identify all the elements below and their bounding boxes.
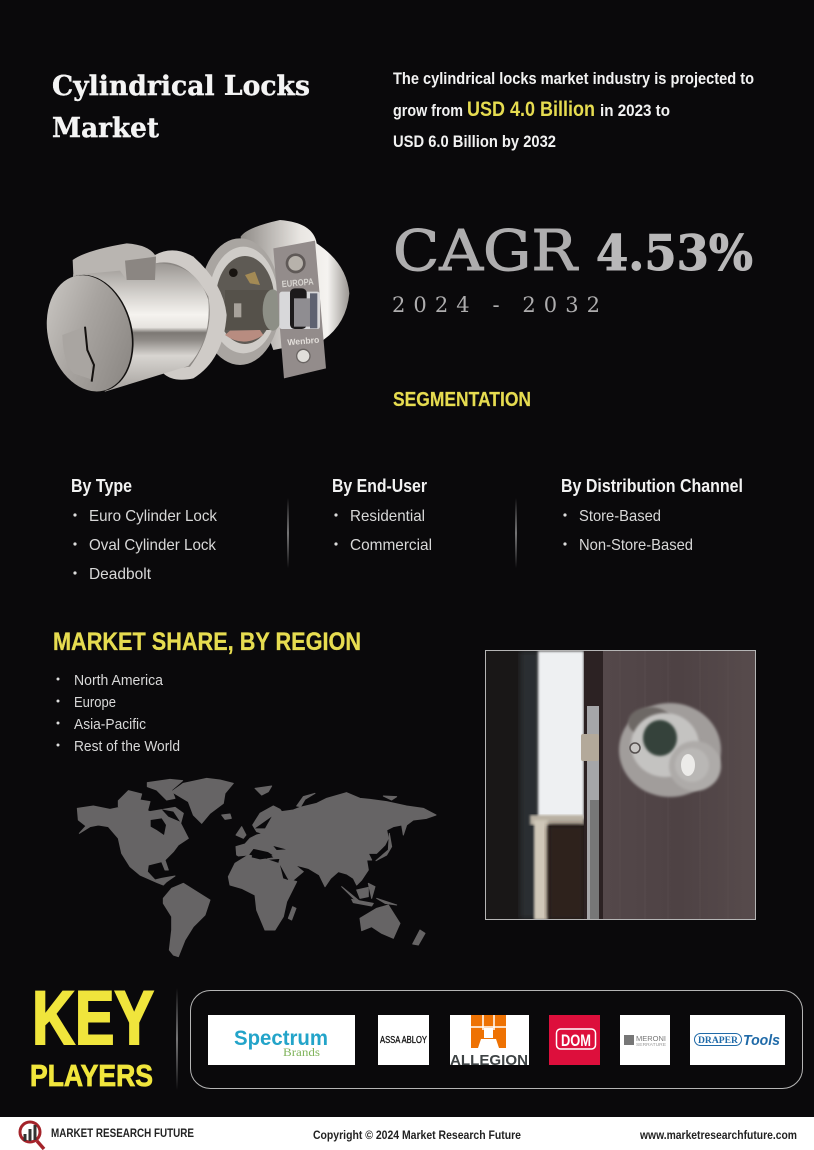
logo: Draper Tools: Tools	[743, 1032, 780, 1049]
heading: segmentation: SEGMENTATION	[393, 389, 531, 411]
Japan	[376, 833, 392, 861]
front knob rim	[155, 250, 227, 380]
CAGR figure: CAGR	[393, 219, 579, 284]
logo: Spectrum Brands	[208, 1015, 355, 1065]
front knob body	[63, 263, 209, 392]
segment: by end-user: By End-User	[332, 476, 427, 496]
market forecast text: The cylindrical locks market industry is projected to	[393, 69, 754, 88]
logo: Allegion	[450, 1015, 529, 1069]
back knob	[241, 220, 349, 350]
world map	[77, 778, 436, 957]
Britain	[236, 827, 246, 838]
key players heading: KEY	[32, 976, 154, 1061]
segment: by distribution channel: Non-Store-Based	[579, 537, 693, 554]
logo: Allegion: ALLEGION	[450, 1052, 528, 1069]
thumb turn	[62, 327, 93, 380]
logo: Assa Abloy	[378, 1015, 429, 1065]
icon: market research future magnifier	[20, 1122, 44, 1149]
Africa	[228, 855, 297, 930]
logo: DOM: DOM	[561, 1031, 591, 1050]
front face	[36, 266, 145, 401]
market forecast text: grow from	[393, 101, 463, 120]
segment: by type: By Type	[71, 476, 132, 496]
logo: Spectrum Brands: Spectrum	[234, 1027, 328, 1050]
latch plate	[273, 241, 326, 378]
image: cylindrical lock: Wenbro	[287, 335, 320, 347]
key players heading	[30, 976, 154, 1093]
segment: by end-user	[332, 476, 432, 554]
logo: Assa Abloy: ASSA ABLOY	[380, 1035, 427, 1046]
CAGR figure	[392, 219, 753, 317]
spindle	[225, 290, 272, 330]
Eurasia	[236, 793, 436, 887]
Iceland and Svalbard	[222, 814, 231, 819]
title: Cylindrical Locks	[52, 71, 310, 102]
Arctic islands	[118, 791, 150, 812]
panel: key player logos	[190, 990, 802, 1088]
market forecast text: USD 4.0 Billion	[467, 98, 595, 121]
segment: by end-user: Commercial	[350, 537, 432, 554]
thumb tab	[73, 243, 156, 280]
segment: by distribution channel: Store-Based	[579, 508, 661, 525]
segment: by end-user: Residential	[350, 508, 425, 525]
image: door with knob lock	[485, 650, 756, 920]
segment: by distribution channel	[561, 476, 743, 554]
footer: MARKET RESEARCH FUTURE	[51, 1126, 194, 1140]
footer: Copyright © 2024 Market Research Future	[313, 1128, 521, 1142]
Greenland	[172, 778, 233, 823]
market forecast text	[393, 69, 754, 151]
image: cylindrical lock	[35, 220, 349, 401]
title	[52, 71, 310, 144]
back rose	[199, 238, 281, 365]
market forecast text: in 2023 to	[600, 101, 670, 120]
logo: Draper Tools: DRAPER	[698, 1036, 738, 1046]
segment: by type	[71, 476, 218, 583]
segment: by type: Deadbolt	[89, 566, 152, 583]
Southeast Asia islands	[342, 887, 360, 902]
heading: market share by region: MARKET SHARE, BY REGION	[53, 628, 361, 656]
footer	[0, 1117, 814, 1150]
region list: North America	[74, 673, 164, 689]
title: Market	[52, 113, 160, 144]
logo: Spectrum Brands: Brands	[283, 1045, 320, 1059]
image: cylindrical lock: EUROPA	[281, 277, 314, 289]
Australia	[360, 905, 400, 938]
region list: Rest of the World	[74, 739, 180, 755]
logo: Meroni Serrature	[620, 1015, 670, 1065]
inland seas	[151, 809, 288, 880]
region list: Europe	[74, 695, 116, 711]
segment: by distribution channel: By Distribution Channel	[561, 476, 743, 496]
logo: Meroni Serrature: SERRATURE	[636, 1042, 666, 1047]
CAGR figure: 2024 - 2032	[392, 293, 600, 317]
market forecast text: USD 6.0 Billion by 2032	[393, 132, 556, 151]
region list: Asia-Pacific	[74, 717, 146, 733]
logo: Meroni Serrature: MERONI	[636, 1034, 666, 1043]
key players heading: PLAYERS	[30, 1058, 153, 1093]
Madagascar	[288, 907, 296, 920]
logo: Draper Tools	[690, 1015, 785, 1065]
region list	[56, 673, 180, 755]
CAGR figure: 4.53%	[596, 224, 753, 282]
knob	[619, 703, 721, 797]
Novaya Zemlya	[297, 793, 315, 807]
segment: by type: Euro Cylinder Lock	[89, 508, 218, 525]
South America	[163, 883, 210, 957]
New Zealand	[413, 930, 425, 945]
logo: DOM	[549, 1015, 600, 1065]
segment: by type: Oval Cylinder Lock	[89, 537, 217, 554]
North America	[77, 806, 188, 885]
